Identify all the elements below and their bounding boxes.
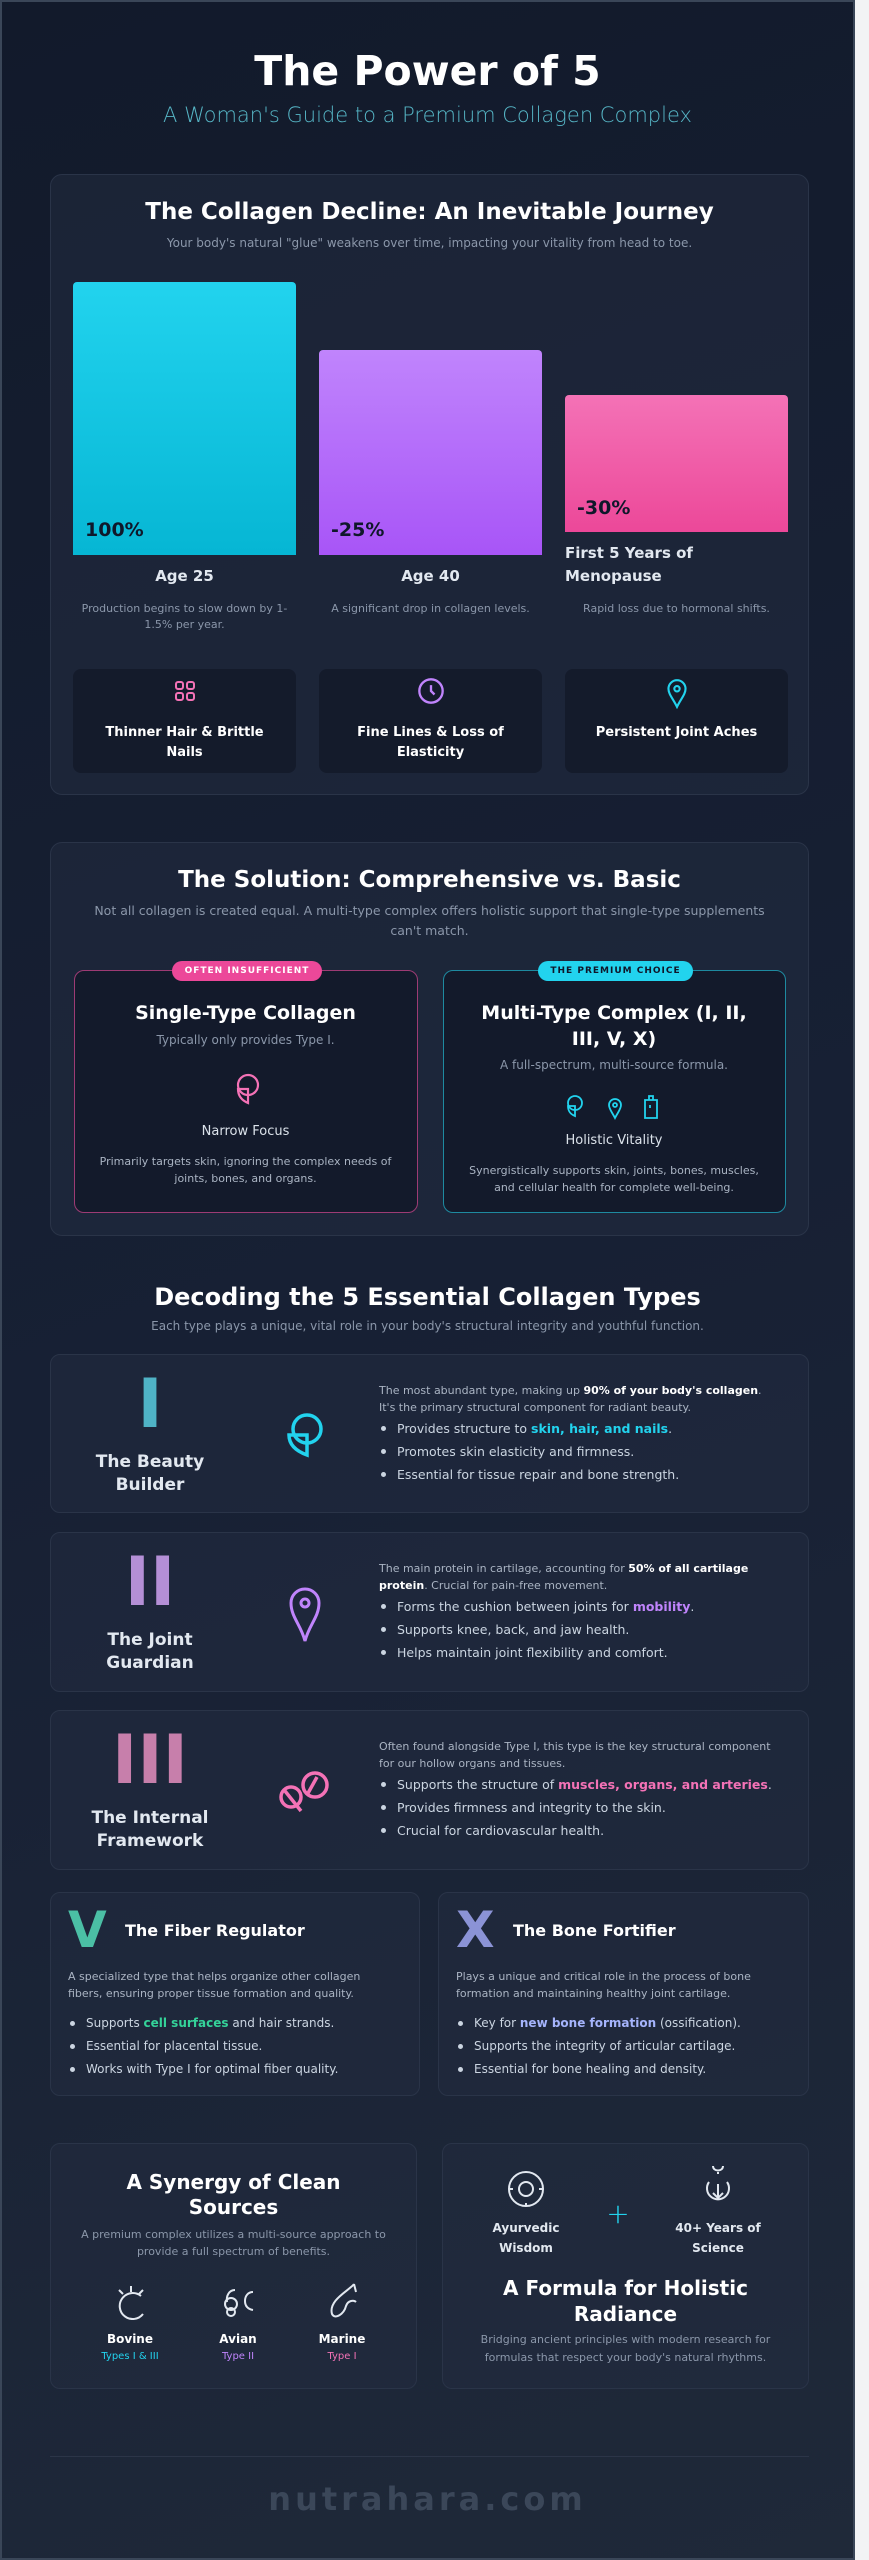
panel: sources <box>50 2143 417 2389</box>
icon: bovine <box>118 2286 144 2320</box>
heading: The Solution: Comprehensive vs. Basic <box>178 867 681 893</box>
card: multi-type: A full-spectrum, multi-source formula. <box>500 1058 728 1072</box>
panel: holistic formula: 40+ Years of <box>675 2221 761 2235</box>
panel: type V: Works with Type I for optimal fiber quality. <box>86 2062 338 2076</box>
icon: pin <box>667 679 687 709</box>
symptom card: hair: Nails <box>166 745 203 760</box>
panel: holistic formula: Ayurvedic <box>493 2221 559 2235</box>
panel: sources: Bovine <box>107 2332 153 2346</box>
panel: sources: Marine <box>319 2332 365 2346</box>
icon: science <box>706 2166 730 2200</box>
panel: type I: Provides structure to skin, hair, and nails. <box>397 1421 672 1436</box>
bar chart: A significant drop in collagen levels. <box>331 602 530 615</box>
symptom card: hair <box>73 669 296 773</box>
panel: type V <box>50 1892 420 2096</box>
panel: type I: I <box>137 1365 163 1444</box>
card: single-type: Single-Type Collagen <box>135 1002 356 1024</box>
panel: solution <box>50 842 809 1236</box>
panel: type III: Supports the structure of muscles, organs, and arteries. <box>397 1777 772 1792</box>
bar chart: Menopause <box>565 567 662 585</box>
icon: clock <box>418 678 444 704</box>
panel: sources: Types I & III <box>101 2351 159 2362</box>
bar: age 40 <box>319 350 542 555</box>
panel: type II: The Joint <box>107 1630 193 1650</box>
bar chart: Age 40 <box>401 567 460 585</box>
bar chart: Production begins to slow down by 1-1.5% per year. <box>82 602 287 631</box>
card: multi-type: Synergistically supports skin, joints, bones, muscles, and cellular health for complete well-being. <box>469 1164 759 1194</box>
text block: subtitle: Your body's natural "glue" weakens over time, impacting your vitality from head to toe. <box>167 236 692 250</box>
card: multi-type <box>443 970 786 1213</box>
panel: type X: The Bone Fortifier <box>513 1921 676 1940</box>
panel: type X: X <box>456 1901 495 1959</box>
bar: menopause <box>565 395 788 532</box>
panel: type V: The Fiber Regulator <box>125 1921 305 1940</box>
heading: collagen types: Decoding the 5 Essential Collagen Types <box>154 1283 701 1311</box>
icons <box>567 1095 658 1120</box>
panel: type II: The main protein in cartilage, accounting for 50% of all cartilage protein. Crucial for pain-free movement. <box>379 1562 748 1592</box>
panel: type I: The Beauty <box>96 1452 204 1472</box>
panel: type II: Helps maintain joint flexibility and comfort. <box>397 1645 668 1660</box>
panel: type I: Promotes skin elasticity and firmness. <box>397 1444 634 1459</box>
title: The Power of 5 <box>254 47 601 95</box>
icon: ayurvedic <box>508 2171 544 2207</box>
icon <box>287 1413 323 1458</box>
panel: sources: Avian <box>219 2332 257 2346</box>
icon: grid <box>175 681 195 701</box>
panel: type III: Framework <box>97 1831 203 1851</box>
panel: type II: II <box>125 1543 175 1622</box>
icon: avian <box>224 2289 254 2317</box>
panel: type V: A specialized type that helps organize other collagen fibers, ensuring proper tissue formation and quality. <box>68 1970 360 2000</box>
panel: type I: Builder <box>116 1475 184 1495</box>
card: single-type <box>74 970 418 1213</box>
icon: marine <box>330 2284 357 2318</box>
panel: sources: Type I <box>327 2351 357 2362</box>
symptom card: lines: Elasticity <box>397 745 464 760</box>
bar chart: First 5 Years of <box>565 544 693 562</box>
panel: sources: Sources <box>189 2195 278 2219</box>
panel: type X <box>438 1892 809 2096</box>
panel: type V: Supports cell surfaces and hair strands. <box>86 2016 334 2030</box>
label: age 25: Age 25 <box>155 567 214 585</box>
panel: type III <box>50 1710 809 1870</box>
symptom card: hair: Thinner Hair & Brittle <box>105 725 264 740</box>
panel: type II: Forms the cushion between joints for mobility. <box>397 1599 694 1614</box>
icon <box>236 1074 260 1105</box>
symptom card: joints <box>565 669 788 773</box>
panel: sources: Type II <box>222 2351 254 2362</box>
symptom card: lines: Fine Lines & Loss of <box>357 725 504 740</box>
icon: plus: + <box>606 2197 630 2230</box>
panel: type III: Crucial for cardiovascular health. <box>397 1823 604 1838</box>
panel: sources: A Synergy of Clean <box>126 2170 341 2194</box>
panel: type X: Supports the integrity of articular cartilage. <box>474 2039 735 2053</box>
panel: type III: Often found alongside Type I, this type is the key structural component for our hollow organs and tissues. <box>379 1740 771 1770</box>
panel: type X: Key for new bone formation (ossification). <box>474 2016 741 2030</box>
panel: type V: Essential for placental tissue. <box>86 2039 262 2053</box>
icon <box>290 1588 320 1642</box>
panel: type III: The Internal <box>91 1808 209 1828</box>
panel: type III: Provides firmness and integrity to the skin. <box>397 1800 666 1815</box>
panel: type I: The most abundant type, making up 90% of your body's collagen. It's the primary structural component for radiant beauty. <box>379 1384 762 1414</box>
badge <box>172 961 322 981</box>
card: multi-type: III, V, X) <box>572 1028 656 1050</box>
card: single-type: Primarily targets skin, ignoring the complex needs of joints, bones, and organs. <box>100 1155 391 1185</box>
footer: brand: nutrahara.com <box>268 2480 587 2518</box>
text block: Not all collagen is created equal. A multi-type complex offers holistic support that single-type supplements can't match. <box>94 903 765 938</box>
panel: holistic formula: Wisdom <box>499 2241 553 2255</box>
panel: sources: A premium complex utilizes a multi-source approach to provide a full spectrum of benefits. <box>81 2228 386 2258</box>
panel: type II: Guardian <box>106 1653 194 1673</box>
bar: age 25 <box>73 282 296 555</box>
panel: holistic formula: Science <box>692 2241 744 2255</box>
panel: type X: Plays a unique and critical role in the process of bone formation and maintaining healthy joint cartilage. <box>456 1970 751 2000</box>
panel: type I: Essential for tissue repair and bone strength. <box>397 1467 679 1482</box>
panel: collagen decline <box>50 174 809 795</box>
bar: age 40: -25% <box>331 519 384 541</box>
bar chart: Rapid loss due to hormonal shifts. <box>583 602 770 615</box>
icon <box>279 1771 329 1812</box>
badge: THE PREMIUM CHOICE <box>550 966 681 976</box>
badge <box>538 961 693 981</box>
panel: type II <box>50 1532 809 1692</box>
card: single-type: Typically only provides Type I. <box>156 1033 335 1047</box>
panel: holistic formula <box>442 2143 809 2389</box>
symptom card: joints: Persistent Joint Aches <box>596 725 757 740</box>
symptom card: lines <box>319 669 542 773</box>
text block: Each type plays a unique, vital role in your body's structural integrity and youthful function. <box>151 1319 704 1333</box>
badge: OFTEN INSUFFICIENT <box>185 966 309 976</box>
card: multi-type: Multi-Type Complex (I, II, <box>481 1002 747 1024</box>
panel: type I <box>50 1354 809 1513</box>
bar: menopause: -30% <box>577 497 630 519</box>
bar: age 25: 100% <box>85 519 144 541</box>
panel: type X: Essential for bone healing and density. <box>474 2062 706 2076</box>
panel: type V: V <box>68 1901 107 1959</box>
card: single-type: Narrow Focus <box>202 1124 289 1139</box>
panel: holistic formula: Radiance <box>574 2302 677 2326</box>
panel: holistic formula: A Formula for Holistic <box>503 2276 748 2300</box>
panel: type III: III <box>112 1721 188 1800</box>
panel: type II: Supports knee, back, and jaw health. <box>397 1622 629 1637</box>
card: multi-type: Holistic Vitality <box>565 1133 662 1148</box>
panel: holistic formula: Bridging ancient principles with modern research for formulas that respect your body's natural rhythms. <box>481 2333 770 2364</box>
subtitle: A Woman's Guide to a Premium Collagen Complex <box>163 103 692 127</box>
bar chart <box>73 282 788 631</box>
heading: The Collagen Decline: An Inevitable Journey <box>145 199 714 225</box>
